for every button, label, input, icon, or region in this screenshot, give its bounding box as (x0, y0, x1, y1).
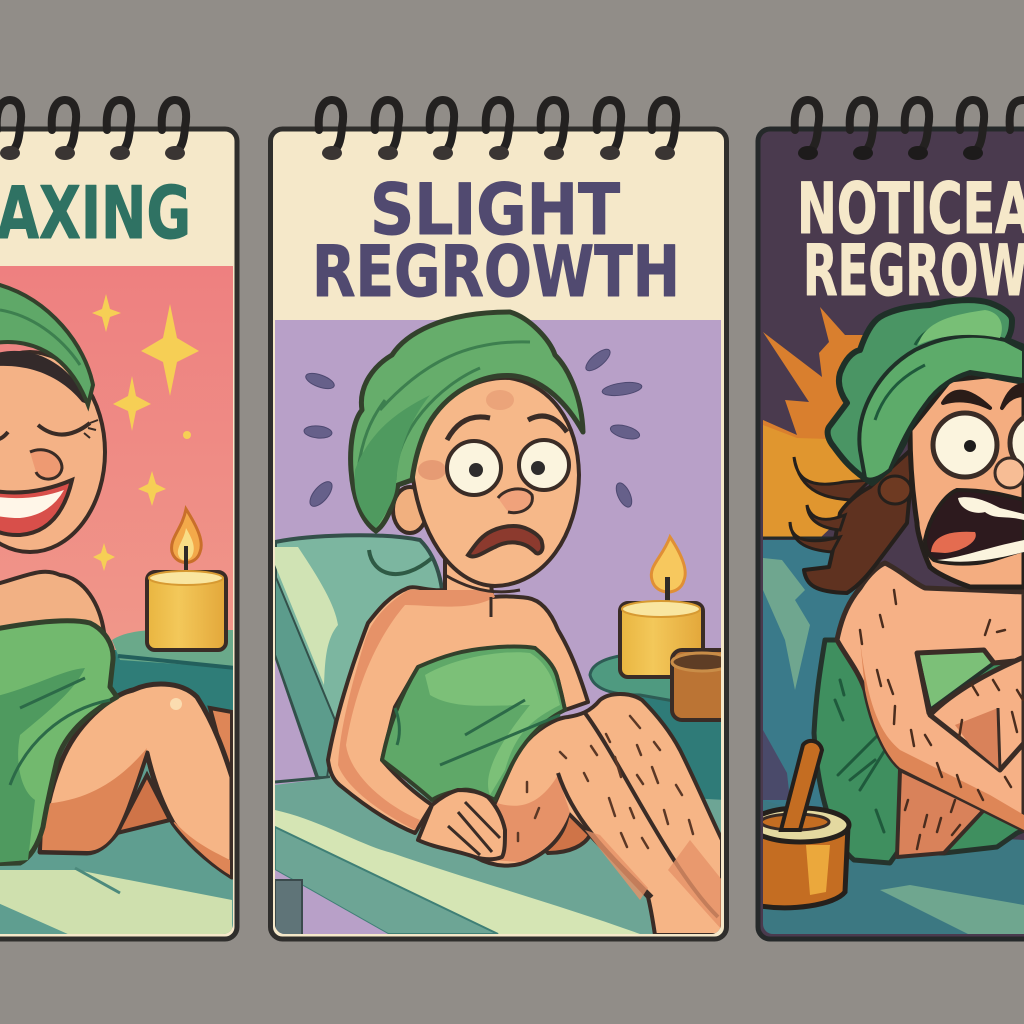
woman: shoulders (0, 570, 106, 632)
icon: wax jar with stick (751, 741, 849, 908)
burst background (763, 307, 863, 480)
side table (588, 654, 721, 800)
woman: leg (40, 684, 232, 877)
heading: slight regrowth: SLIGHT (370, 169, 620, 251)
binding rings (0, 100, 186, 160)
mouth (468, 526, 543, 556)
panel: right, noticeable regrowth (751, 100, 1024, 939)
woman: head (351, 312, 583, 586)
eyes (447, 441, 501, 495)
icon: candle (620, 537, 703, 677)
lounge back (763, 536, 856, 808)
panel background: lavender (275, 320, 721, 940)
woman: head (0, 285, 105, 552)
heading: waxing: AXING (0, 171, 191, 255)
woman: hair (790, 447, 914, 593)
woman: hairy arms and legs (837, 563, 1024, 857)
woman: hairy legs (475, 694, 722, 935)
icon: sparkles (92, 294, 199, 571)
mouth (925, 490, 1024, 564)
panel: middle, slight regrowth (270, 100, 732, 940)
panel background: pink (0, 266, 233, 666)
hand (418, 790, 505, 859)
side table (112, 630, 233, 714)
chair back (275, 535, 445, 790)
icon: worry marks (304, 346, 643, 510)
binding rings (319, 100, 676, 160)
heading: slight regrowth (316, 181, 676, 298)
towel (382, 646, 565, 800)
icon: candle (147, 509, 226, 650)
towel (0, 621, 117, 864)
woman: hair wisp (369, 550, 432, 574)
binding rings (795, 100, 1024, 160)
bed (0, 735, 233, 935)
heading: slight regrowth: REGROWTH (312, 231, 680, 313)
panel: left, relaxed after waxing (0, 100, 240, 939)
towel turban (351, 312, 583, 531)
woman: torso and arm (328, 560, 588, 833)
eyes (933, 413, 997, 477)
bed (275, 778, 725, 935)
heading: noticeable regrowth (801, 180, 1024, 296)
towel (814, 640, 1024, 863)
towel turban (828, 300, 1024, 483)
bed (763, 800, 1024, 935)
icon: wax jar (670, 648, 721, 722)
woman: head (828, 300, 1024, 587)
